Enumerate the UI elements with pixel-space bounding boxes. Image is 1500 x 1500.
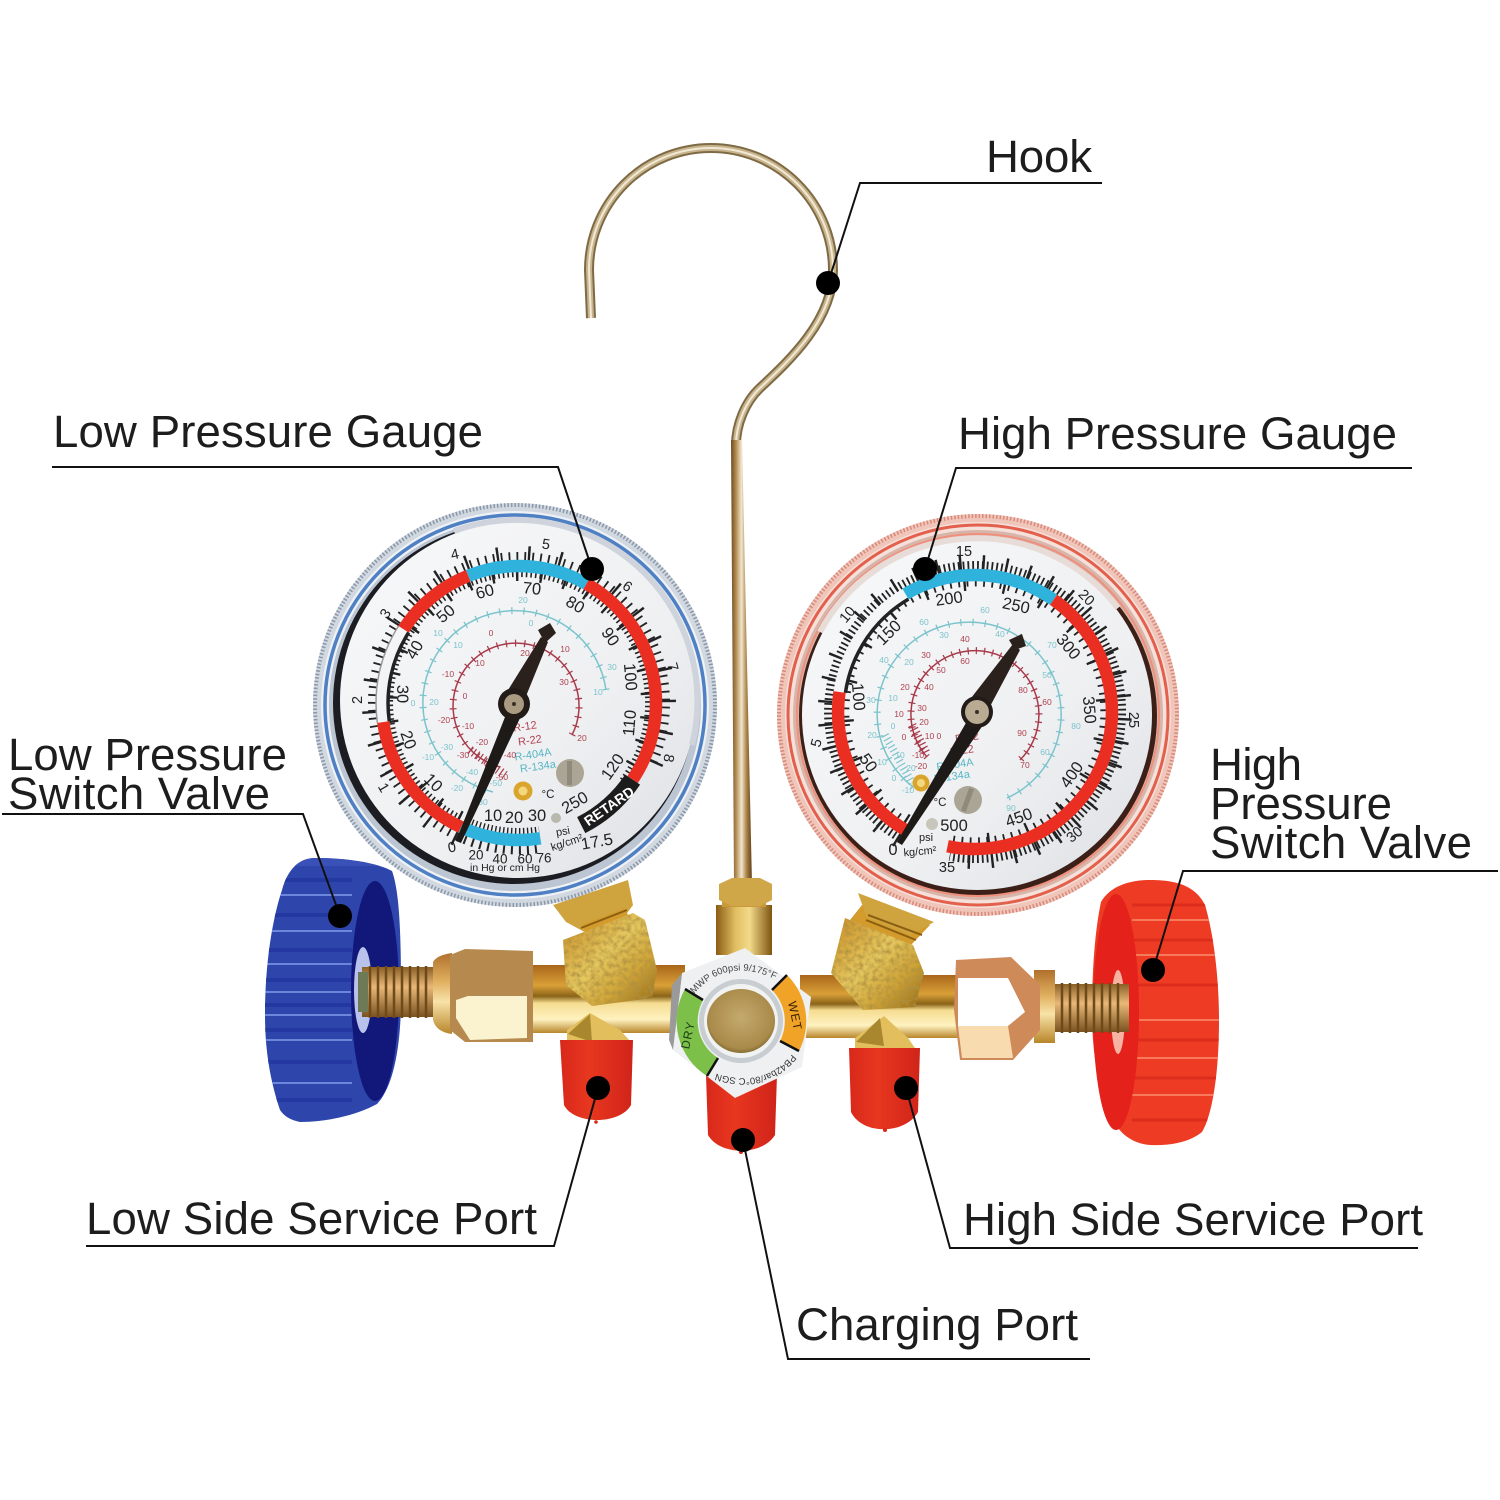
refrigerant legend and small temperature numbers: -50 bbox=[496, 772, 508, 782]
inner psi scale numbers: 120 bbox=[598, 751, 628, 783]
refrigerant legend and small temperature numbers: 60 bbox=[1040, 747, 1050, 757]
refrigerant legend and small temperature numbers: 60 bbox=[980, 605, 990, 615]
outer kg/cm2 scale numbers: 25 bbox=[1125, 712, 1141, 728]
inner psi scale numbers: 350 bbox=[1079, 696, 1099, 724]
refrigerant legend and small temperature numbers: 20 bbox=[867, 730, 877, 740]
refrigerant legend and small temperature numbers: 10 bbox=[593, 687, 603, 697]
outer bar scale numbers: 5 bbox=[541, 537, 551, 553]
refrigerant legend and small temperature numbers: 0 bbox=[891, 721, 896, 731]
inner psi scale numbers: 70 bbox=[522, 579, 542, 599]
refrigerant legend and small temperature numbers: R-134a bbox=[519, 758, 558, 775]
refrigerant legend and small temperature numbers: 70 bbox=[1020, 760, 1030, 770]
inner psi scale numbers: kg/cm² bbox=[549, 832, 585, 854]
sight glass hex: MWP 600psi 9/175°F bbox=[690, 964, 778, 994]
sight glass hex: PB42bar/80°C SGN bbox=[715, 1054, 796, 1085]
refrigerant legend and small temperature numbers: -20 bbox=[476, 737, 488, 747]
sight glass hex bbox=[669, 948, 811, 1098]
outer bar scale numbers: 4 bbox=[449, 546, 461, 564]
inner psi scale numbers: 200 bbox=[934, 588, 964, 610]
refrigerant legend and small temperature numbers: 40 bbox=[995, 629, 1005, 639]
wet segment bbox=[772, 975, 806, 1051]
refrigerant legend and small temperature numbers: 60 bbox=[960, 656, 970, 666]
knob cavity bbox=[1093, 894, 1139, 1130]
refrigerant legend and small temperature numbers: -10 bbox=[462, 721, 474, 731]
refrigerant legend and small temperature numbers: 0 bbox=[892, 773, 897, 783]
outer kg/cm2 scale numbers: 5 bbox=[808, 737, 826, 749]
inner psi scale numbers: 30 bbox=[393, 685, 411, 703]
refrigerant legend and small temperature numbers: 10 bbox=[453, 640, 463, 650]
outer bar scale numbers: 6 bbox=[619, 578, 635, 596]
inner psi scale numbers: 50 bbox=[855, 750, 881, 776]
outer kg/cm2 scale numbers: 15 bbox=[956, 544, 972, 560]
inner psi scale numbers: psi bbox=[555, 825, 571, 839]
refrigerant legend and small temperature numbers: R-12 bbox=[954, 730, 980, 746]
refrigerant legend and small temperature numbers: -20 bbox=[451, 783, 463, 793]
callout: hook: Hook bbox=[986, 131, 1092, 182]
refrigerant legend and small temperature numbers: 40 bbox=[879, 655, 889, 665]
low pressure gauge bbox=[313, 503, 717, 907]
right T body bbox=[831, 918, 924, 1010]
inner psi scale numbers: 500 bbox=[940, 817, 968, 835]
refrigerant legend and small temperature numbers: -20 bbox=[915, 761, 927, 771]
refrigerant legend and small temperature numbers: 10 bbox=[560, 644, 570, 654]
outer kg/cm2 scale numbers: 10 bbox=[837, 604, 859, 626]
left pipe bbox=[525, 965, 685, 1033]
right gauge stem bbox=[850, 893, 934, 945]
refrigerant legend and small temperature numbers: 20 bbox=[518, 595, 528, 605]
hex labels: DRY bbox=[678, 1020, 698, 1050]
refrigerant legend and small temperature numbers: 50 bbox=[936, 665, 946, 675]
refrigerant legend and small temperature numbers: 0 bbox=[529, 618, 534, 628]
refrigerant temperature scales bbox=[423, 611, 606, 792]
inner psi scale numbers: 60 bbox=[474, 581, 496, 603]
callout: high pressure switch valve bbox=[1141, 739, 1498, 982]
refrigerant legend and small temperature numbers: 20 bbox=[577, 733, 587, 743]
refrigerant legend and small temperature numbers: 20 bbox=[900, 682, 910, 692]
callout: low pressure switch valve: Switch Valve bbox=[8, 768, 270, 819]
refrigerant legend and small temperature numbers: 60 bbox=[1042, 697, 1052, 707]
inner psi scale numbers: psi bbox=[919, 832, 933, 844]
refrigerant legend and small temperature numbers: 10 bbox=[895, 750, 905, 760]
right hex nut and thread bbox=[954, 957, 1129, 1060]
hook bbox=[589, 148, 833, 885]
bezel bbox=[777, 514, 1179, 916]
inner psi scale numbers: 10 bbox=[484, 807, 502, 825]
dial face bbox=[802, 540, 1152, 890]
outer kg/cm2 scale numbers: 30 bbox=[1064, 824, 1086, 846]
outer bar scale numbers: 1 bbox=[374, 781, 392, 795]
inner psi scale numbers: 300 bbox=[1052, 631, 1084, 663]
blue knob: low pressure switch valve bbox=[262, 850, 401, 1122]
refrigerant legend and small temperature numbers: 90 bbox=[1006, 803, 1016, 813]
refrigerant legend and small temperature numbers: R-22 bbox=[949, 743, 975, 759]
inner psi scale numbers: 76 bbox=[536, 850, 552, 866]
refrigerant legend and small temperature numbers: -50 bbox=[490, 778, 502, 788]
refrigerant legend and small temperature numbers: 10 bbox=[475, 658, 485, 668]
high pressure gauge bbox=[777, 514, 1179, 916]
refrigerant legend and small temperature numbers bbox=[866, 605, 1081, 813]
callout: low side service port: Low Side Service Port bbox=[86, 1193, 537, 1244]
left lower cone bbox=[567, 1013, 632, 1043]
zero adjust screw and vents bbox=[912, 774, 982, 830]
refrigerant legend and small temperature numbers: -40 bbox=[504, 750, 516, 760]
inner psi scale numbers: 250 bbox=[559, 788, 591, 818]
inner psi scale numbers: 0 bbox=[888, 841, 898, 859]
refrigerant legend and small temperature numbers: 0 bbox=[902, 732, 907, 742]
inner psi scale numbers: 50 bbox=[433, 601, 459, 627]
refrigerant legend and small temperature numbers: 30 bbox=[939, 630, 949, 640]
refrigerant temperature scales bbox=[877, 622, 1061, 798]
inner psi scale numbers: 40 bbox=[492, 852, 508, 866]
callout: high pressure switch valve: Switch Valve bbox=[1210, 817, 1472, 868]
callout: high side service port: High Side Service Port bbox=[963, 1194, 1423, 1245]
refrigerant legend and small temperature numbers: 20 bbox=[520, 648, 530, 658]
needle bbox=[456, 623, 556, 843]
inner psi scale numbers: 60 bbox=[517, 852, 533, 866]
inner psi scale numbers bbox=[848, 588, 1099, 859]
callout: charging port: Charging Port bbox=[796, 1299, 1078, 1350]
refrigerant legend and small temperature numbers: 40 bbox=[924, 682, 934, 692]
low side service port cap bbox=[560, 1040, 633, 1124]
sight glass hex: WET bbox=[785, 1000, 805, 1032]
refrigerant legend and small temperature numbers: -30 bbox=[441, 742, 453, 752]
refrigerant legend and small temperature numbers: -40 bbox=[466, 767, 478, 777]
refrigerant legend and small temperature numbers: R-134a bbox=[933, 768, 972, 785]
inner psi scale numbers: 150 bbox=[873, 617, 905, 649]
refrigerant legend and small temperature numbers: 30 bbox=[917, 703, 927, 713]
refrigerant legend and small temperature numbers: R-404A bbox=[514, 746, 553, 764]
refrigerant legend and small temperature numbers: 90 bbox=[1017, 728, 1027, 738]
callout: low side service port bbox=[86, 1076, 610, 1246]
refrigerant legend and small temperature numbers: 0 bbox=[463, 691, 468, 701]
left gauge stem bbox=[553, 880, 633, 945]
refrigerant legend and small temperature numbers: 30 bbox=[607, 662, 617, 672]
refrigerant legend and small temperature numbers: -10 bbox=[912, 750, 924, 760]
inner psi scale numbers: °C bbox=[542, 789, 554, 801]
inner psi scale numbers: 90 bbox=[597, 624, 623, 650]
refrigerant legend and small temperature numbers: 50 bbox=[1042, 670, 1052, 680]
tick rings bbox=[825, 562, 1125, 862]
refrigerant legend and small temperature numbers: -20 bbox=[438, 715, 450, 725]
refrigerant legend and small temperature numbers: 30 bbox=[921, 650, 931, 660]
outer bar scale numbers: 2 bbox=[350, 696, 366, 704]
inner psi scale numbers: 40 bbox=[403, 638, 427, 662]
callout: high pressure gauge: High Pressure Gauge bbox=[958, 408, 1397, 459]
refrigerant legend and small temperature numbers: -30 bbox=[457, 750, 469, 760]
retard label: RETARD bbox=[581, 783, 637, 829]
refrigerant legend and small temperature numbers: -10 bbox=[422, 752, 434, 762]
refrigerant legend and small temperature numbers: 0 bbox=[411, 698, 416, 708]
refrigerant legend and small temperature numbers: 30 bbox=[866, 695, 876, 705]
charging port cap bbox=[706, 1075, 777, 1154]
refrigerant legend and small temperature numbers: 20 bbox=[904, 657, 914, 667]
high side service port cap bbox=[849, 1048, 920, 1132]
refrigerant legend and small temperature numbers: 30 bbox=[559, 677, 569, 687]
refrigerant legend and small temperature numbers: 20 bbox=[906, 763, 916, 773]
refrigerant legend and small temperature numbers bbox=[411, 595, 617, 807]
callout: high side service port bbox=[894, 1076, 1423, 1248]
callout: charging port bbox=[731, 1128, 1090, 1359]
right lower cone bbox=[855, 1016, 915, 1048]
refrigerant legend and small temperature numbers: 10 bbox=[888, 693, 898, 703]
brass manifold body bbox=[525, 878, 965, 1048]
dial face bbox=[340, 522, 696, 878]
knob cavity bbox=[351, 881, 399, 1101]
inner psi scale numbers: 250 bbox=[1001, 594, 1031, 618]
inner psi scale numbers: 17.5 bbox=[580, 830, 614, 854]
outer bar scale numbers: 8 bbox=[659, 753, 677, 763]
needle bbox=[897, 634, 1026, 845]
outer bar scale numbers bbox=[350, 537, 681, 857]
inner psi scale numbers: in Hg or cm Hg bbox=[470, 862, 540, 874]
outer bar scale numbers: 7 bbox=[663, 661, 681, 673]
refrigerant legend and small temperature numbers: 10 bbox=[894, 709, 904, 719]
bezel highlight over dark ring bbox=[454, 520, 697, 745]
inner psi scale numbers: 100 bbox=[848, 683, 868, 711]
inner psi scale numbers: kg/cm² bbox=[903, 845, 937, 859]
colour bands bbox=[838, 575, 1112, 849]
refrigerant legend and small temperature numbers: -10 bbox=[442, 669, 454, 679]
centre stem bbox=[716, 878, 772, 955]
inner psi scale numbers: 20 bbox=[396, 728, 420, 752]
callout: high pressure gauge bbox=[913, 408, 1412, 581]
refrigerant legend and small temperature numbers: 80 bbox=[1071, 721, 1081, 731]
callout: low pressure gauge bbox=[52, 406, 604, 581]
outer bar scale numbers: 0 bbox=[447, 839, 457, 857]
outer bar scale numbers: 3 bbox=[377, 606, 395, 622]
refrigerant legend and small temperature numbers: 80 bbox=[1018, 685, 1028, 695]
inner psi scale numbers: 100 bbox=[620, 663, 640, 691]
refrigerant legend and small temperature numbers: R-404A bbox=[936, 756, 975, 774]
callout: low pressure switch valve: Low Pressure bbox=[8, 729, 287, 780]
refrigerant legend and small temperature numbers: -10 bbox=[902, 785, 914, 795]
outer kg/cm2 scale numbers bbox=[808, 544, 1141, 876]
inner psi scale numbers: 20 bbox=[468, 848, 484, 862]
callout: high pressure switch valve: High bbox=[1210, 739, 1302, 790]
dry segment bbox=[677, 989, 718, 1076]
refrigerant legend and small temperature numbers: 40 bbox=[960, 634, 970, 644]
zero adjust screw and vents bbox=[514, 759, 584, 823]
refrigerant legend and small temperature numbers: 60 bbox=[919, 617, 929, 627]
refrigerant legend and small temperature numbers: 10 bbox=[433, 628, 443, 638]
refrigerant legend and small temperature numbers: 70 bbox=[1047, 640, 1057, 650]
refrigerant legend and small temperature numbers: 30 bbox=[478, 797, 488, 807]
inner psi scale numbers: 450 bbox=[1003, 805, 1035, 831]
callout: high pressure switch valve: Pressure bbox=[1210, 778, 1392, 829]
left T body bbox=[563, 913, 657, 1006]
right pipe bbox=[800, 975, 965, 1038]
inner psi scale numbers: 30 bbox=[528, 807, 546, 825]
inner psi scale numbers bbox=[393, 579, 640, 874]
inner psi scale numbers: 110 bbox=[620, 709, 640, 737]
colour bands bbox=[383, 566, 656, 840]
refrigerant legend and small temperature numbers: 10 bbox=[877, 757, 887, 767]
sight glass bbox=[699, 979, 783, 1063]
inner psi scale numbers: °C bbox=[934, 797, 946, 809]
outer kg/cm2 scale numbers: 20 bbox=[1075, 587, 1097, 609]
callout: hook bbox=[816, 131, 1102, 295]
refrigerant legend and small temperature numbers: R-12 bbox=[512, 719, 538, 735]
refrigerant legend and small temperature numbers: 20 bbox=[429, 697, 439, 707]
inner psi scale numbers: 400 bbox=[1057, 759, 1087, 791]
inner psi scale numbers: 10 bbox=[420, 770, 446, 796]
refrigerant legend and small temperature numbers: 10 0 bbox=[925, 731, 942, 741]
red knob: high pressure switch valve bbox=[1092, 880, 1222, 1145]
inner psi scale numbers: 80 bbox=[563, 593, 587, 617]
bezel highlight over dark ring bbox=[820, 538, 1118, 632]
refrigerant legend and small temperature numbers: 0 bbox=[489, 628, 494, 638]
refrigerant legend and small temperature numbers: R-22 bbox=[517, 733, 543, 749]
bezel bbox=[313, 503, 717, 907]
outer kg/cm2 scale numbers: 35 bbox=[939, 860, 955, 876]
left hex nut and thread bbox=[358, 949, 533, 1042]
tick rings bbox=[369, 553, 669, 850]
callout: low pressure switch valve bbox=[2, 729, 352, 928]
refrigerant legend and small temperature numbers: 20 bbox=[919, 717, 929, 727]
inner psi scale numbers: 20 bbox=[505, 809, 523, 827]
callout: low pressure gauge: Low Pressure Gauge bbox=[53, 406, 483, 457]
